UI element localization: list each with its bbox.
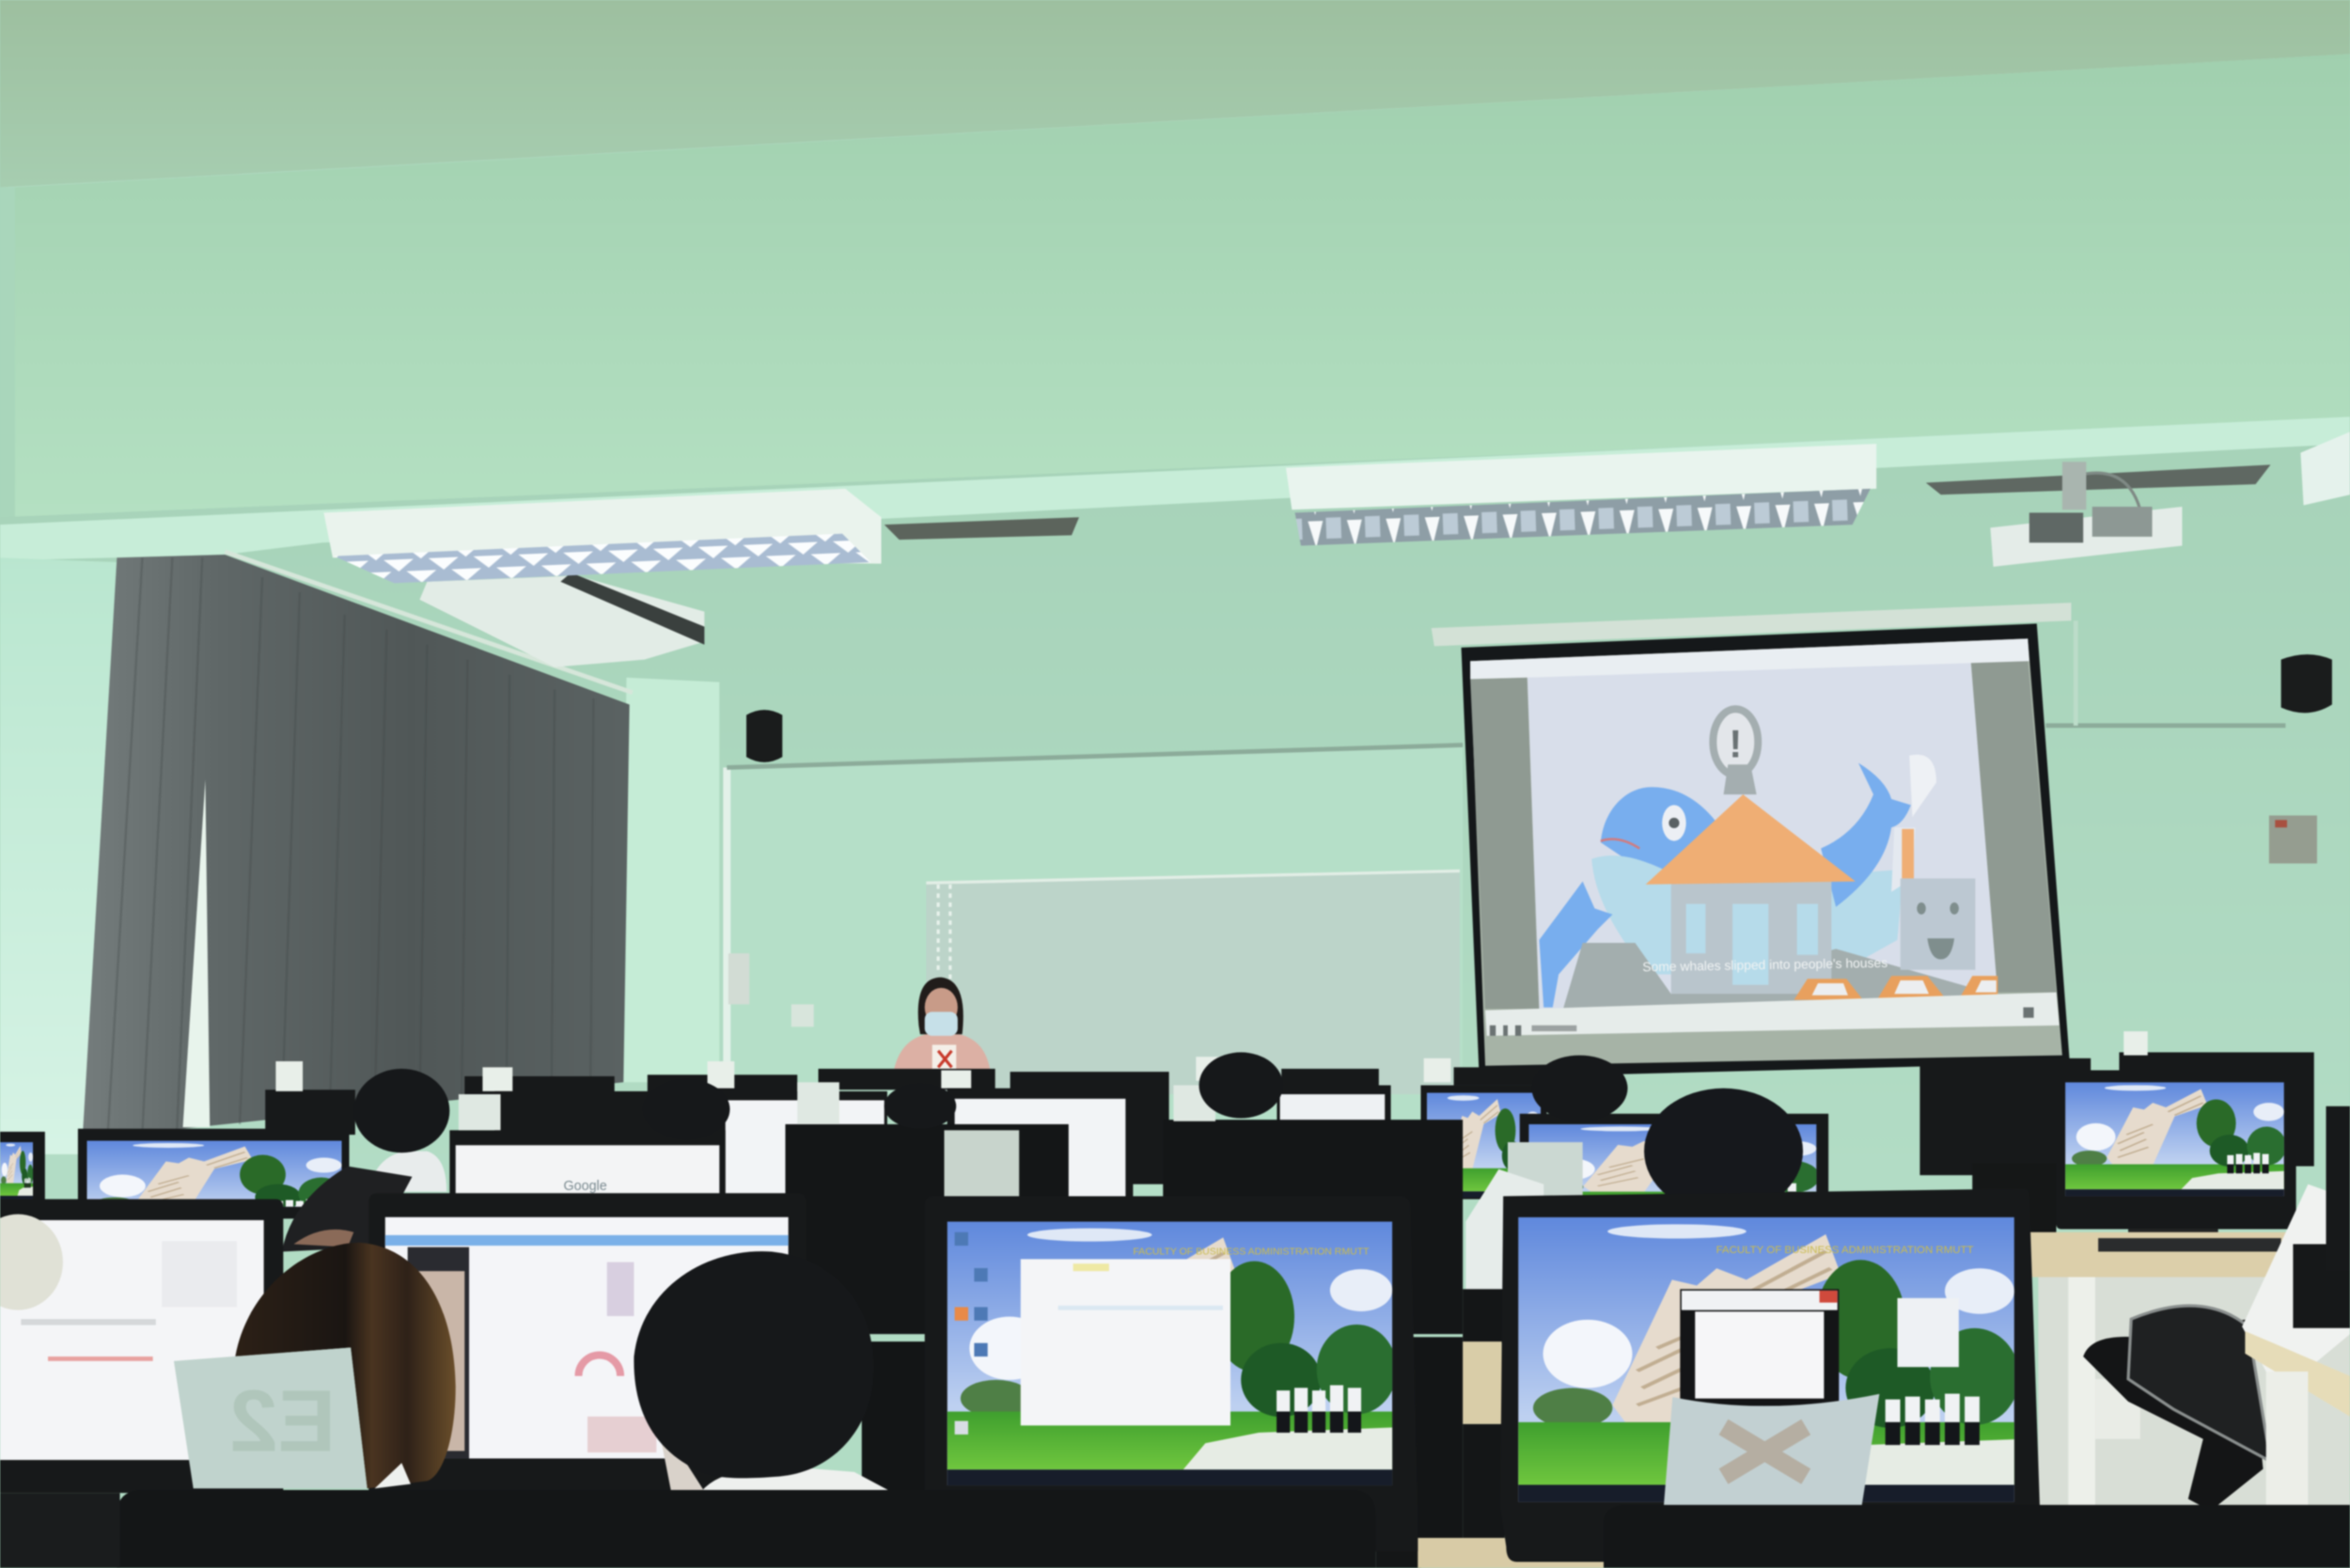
monitor — [0, 1132, 45, 1200]
front desk edge — [1418, 1538, 1604, 1568]
ceiling light: right edge — [2300, 431, 2350, 505]
keyboard — [2098, 1238, 2281, 1251]
monitor — [1277, 1085, 1391, 1130]
monitor — [948, 1089, 1133, 1202]
beam underside — [0, 416, 2350, 560]
right furniture — [2015, 1232, 2350, 1521]
ceiling — [0, 0, 2350, 187]
video subtitle: Some whales slipped into people's houses — [1642, 955, 1888, 974]
illustration: house — [1646, 794, 1856, 994]
conduit and wall fittings — [727, 620, 2317, 1079]
monitor — [1420, 1085, 1546, 1200]
card on monitor — [944, 1130, 1019, 1196]
stacked cards — [459, 1082, 1215, 1130]
foreground monitor tops — [0, 1490, 2350, 1568]
front row right monitor — [1500, 1188, 2040, 1561]
illustration: alert icon: ! — [1729, 721, 1742, 765]
student with white shirt — [353, 1069, 449, 1192]
player control bar — [1485, 993, 2060, 1036]
illustration: whale — [1539, 755, 1936, 1008]
curtain — [83, 552, 633, 1139]
video area — [1528, 661, 1998, 1009]
player controls — [1490, 1008, 2034, 1036]
monitor — [494, 1091, 887, 1200]
student behind left monitors — [282, 1167, 412, 1251]
name card E2 — [174, 1347, 368, 1488]
middle row monitors — [0, 1071, 2296, 1334]
screen surface — [1470, 638, 2062, 1066]
desk between monitors — [1457, 1341, 1502, 1424]
window column — [622, 678, 719, 1082]
lower wall — [727, 745, 1463, 1200]
front centre student — [634, 1251, 900, 1496]
right monitor — [2057, 1071, 2296, 1238]
name card E2: E2 — [229, 1372, 336, 1470]
browser text: Google — [563, 1179, 607, 1194]
rainbow graphic — [578, 1355, 620, 1376]
projector — [1990, 462, 2182, 567]
front row centre monitor — [925, 1196, 1418, 1551]
air conditioner — [419, 572, 704, 667]
whiteboard — [926, 870, 1460, 1094]
grey side bars — [1470, 678, 1539, 1009]
monitor back — [785, 1124, 1069, 1334]
open window — [1680, 1289, 1839, 1406]
file window — [1021, 1259, 1230, 1425]
left wall — [0, 557, 117, 1154]
illustration: alert icon — [1713, 709, 1758, 794]
speakers — [746, 654, 2332, 762]
ceiling beam face — [12, 55, 2350, 522]
card with cross — [1664, 1394, 1879, 1508]
player title bar — [1470, 638, 2029, 679]
illustration: ground — [1563, 943, 1998, 1009]
card on monitor — [1508, 1142, 1583, 1200]
dark columns between monitors — [862, 1337, 1463, 1538]
monitor — [78, 1129, 349, 1235]
back row students — [282, 1052, 1803, 1319]
presenter — [893, 978, 991, 1074]
ceiling light: centre — [1286, 444, 2270, 545]
projection screen — [1432, 603, 2071, 1077]
desktop icons — [955, 1232, 988, 1435]
context menu — [1897, 1298, 1959, 1367]
monitor — [1520, 1114, 1828, 1218]
screen housing — [1432, 603, 2071, 646]
faculty banner text: FACULTY OF BUSINESS ADMINISTRATION RMUTT — [1716, 1245, 1974, 1256]
monitor with search page — [449, 1130, 726, 1202]
front left student with long hair — [235, 1243, 456, 1488]
front row second monitor — [368, 1193, 807, 1490]
small white cards — [275, 1031, 2148, 1091]
right chair and student — [2083, 1106, 2350, 1521]
monitor back — [1163, 1120, 1463, 1334]
dark fill between rows — [1376, 1289, 1505, 1568]
back row monitors — [265, 1052, 2314, 1184]
faculty banner text: FACULTY OF BUSINESS ADMINISTRATION RMUTT — [1133, 1247, 1370, 1258]
ceiling light: left — [323, 489, 1079, 583]
illustration: robot — [1794, 829, 1998, 1000]
beam left return — [0, 187, 15, 525]
screen frame — [1462, 623, 2070, 1077]
back wall — [0, 420, 2350, 1200]
front row left monitor — [0, 1200, 283, 1493]
